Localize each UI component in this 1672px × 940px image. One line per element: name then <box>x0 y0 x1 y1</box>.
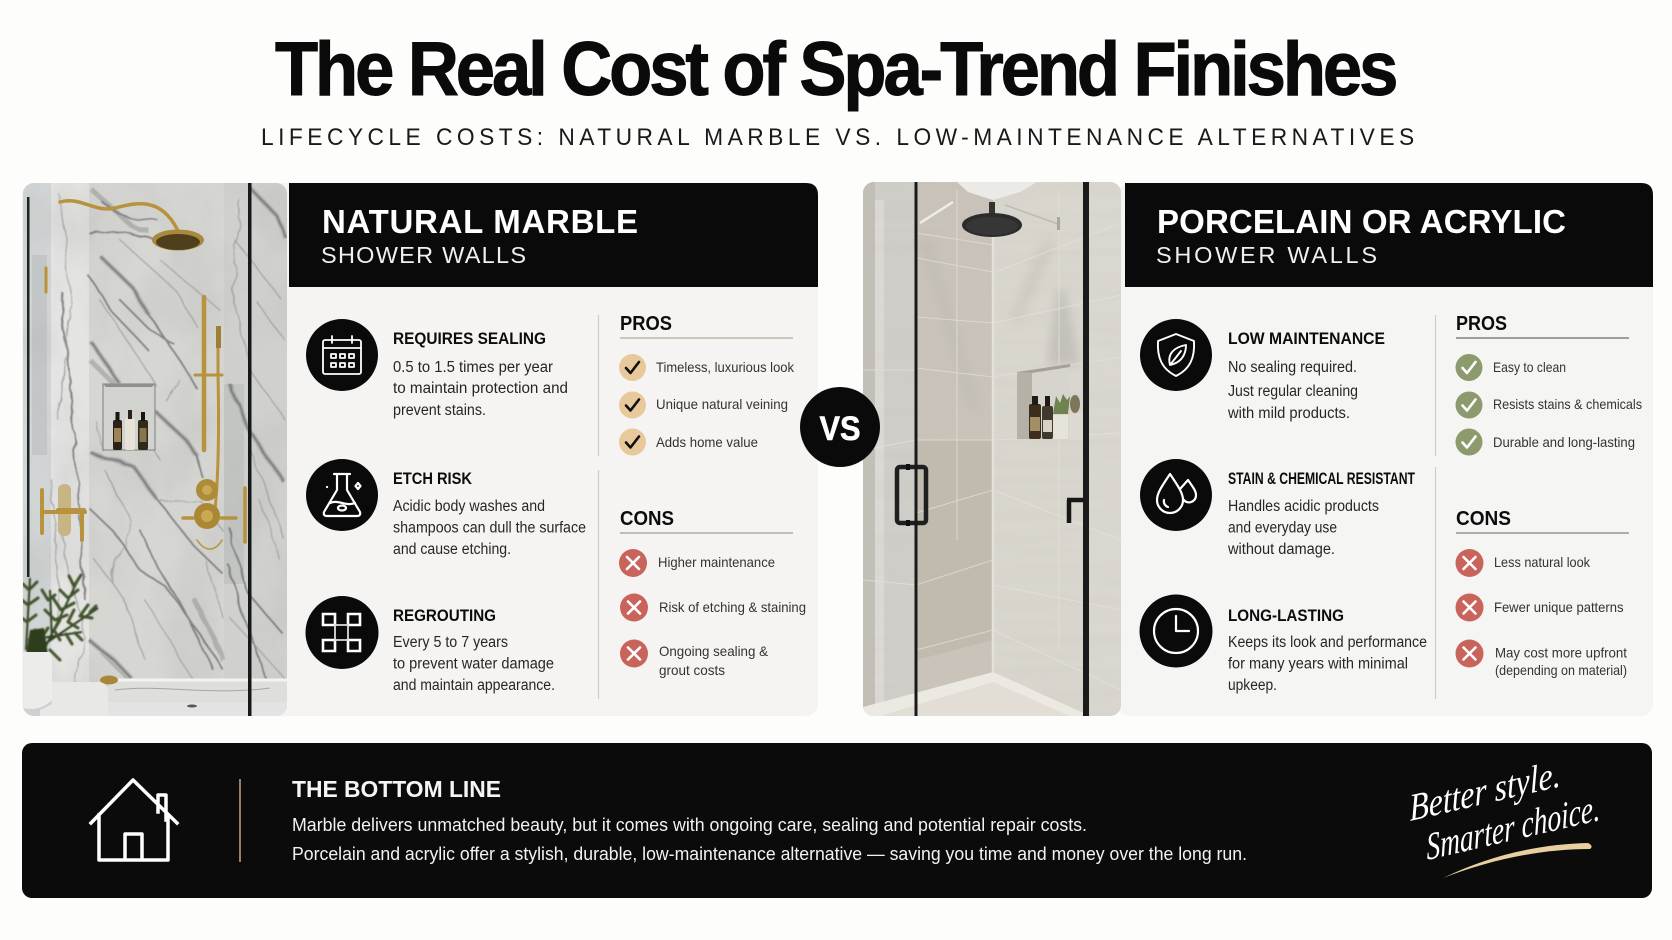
item: requires sealing: prevent stains. <box>393 402 486 419</box>
bench <box>100 676 287 716</box>
item: low maintenance: with mild products. <box>1227 405 1350 422</box>
lever <box>1067 500 1084 523</box>
heading: THE BOTTOM LINE <box>292 776 501 802</box>
header band <box>289 183 818 287</box>
item: long-lasting: LONG-LASTING <box>1228 606 1344 625</box>
pros list: marble: Unique natural veining <box>656 396 788 412</box>
icon: clock <box>1154 609 1198 653</box>
item: etch risk: and cause etching. <box>393 541 511 558</box>
subheading: SHOWER WALLS <box>1156 242 1377 268</box>
icon: flask <box>324 474 360 516</box>
glass door lines <box>27 183 252 716</box>
plant and pot <box>22 575 108 716</box>
item: long-lasting: Keeps its look and performance <box>1228 634 1427 651</box>
pros list: porcelain: Resists stains & chemicals <box>1493 396 1642 412</box>
item: low maintenance: LOW MAINTENANCE <box>1228 329 1385 348</box>
item: stain and chemical resistant: without damage. <box>1227 541 1335 558</box>
subheading: SHOWER WALLS <box>321 242 526 268</box>
item: regrouting: to prevent water damage <box>393 656 554 672</box>
item: etch risk: ETCH RISK <box>393 469 473 488</box>
title: The Real Cost of Spa-Trend Finishes <box>275 27 1398 112</box>
item: stain and chemical resistant <box>1140 459 1415 558</box>
item: stain and chemical resistant: STAIN & CHEMICAL RESISTANT <box>1228 469 1415 488</box>
item: regrouting: Every 5 to 7 years <box>393 634 508 651</box>
pros list: marble: Timeless, luxurious look <box>656 359 795 375</box>
gold fixtures <box>42 268 245 549</box>
item: etch risk <box>306 459 586 558</box>
icon: tile grid <box>323 614 360 651</box>
item: requires sealing <box>306 319 568 419</box>
item: requires sealing: 0.5 to 1.5 times per year <box>393 359 553 376</box>
cons list: marble: Higher maintenance <box>658 554 775 570</box>
VS badge <box>800 387 880 467</box>
pros list: porcelain: Durable and long-lasting <box>1493 434 1635 450</box>
pros list: marble <box>619 312 795 456</box>
cons list: porcelain: (depending on material) <box>1495 662 1627 678</box>
glass frame lines <box>914 182 1089 716</box>
item: regrouting: and maintain appearance. <box>393 677 555 694</box>
cons list: porcelain <box>1456 507 1629 678</box>
photo: porcelain shower <box>863 182 1121 716</box>
heading: PORCELAIN OR ACRYLIC <box>1157 203 1566 240</box>
cons list: marble: CONS <box>620 507 674 530</box>
pros list: porcelain: Easy to clean <box>1493 359 1566 375</box>
cons list: porcelain: CONS <box>1456 507 1511 530</box>
body text <box>292 814 1247 864</box>
header band <box>1125 183 1653 287</box>
item: requires sealing: REQUIRES SEALING <box>393 329 546 348</box>
shelf niche <box>103 384 155 450</box>
pros list: marble: PROS <box>620 312 672 335</box>
cons list: marble <box>619 507 806 678</box>
item: long-lasting: for many years with minimal <box>1228 656 1408 672</box>
shower head and arm <box>60 201 204 250</box>
item: etch risk: shampoos can dull the surface <box>393 520 586 536</box>
item: etch risk: Acidic body washes and <box>393 498 545 515</box>
pros list: marble: Adds home value <box>656 434 758 450</box>
icon: calendar <box>323 336 361 374</box>
wall niche <box>1017 364 1083 440</box>
shower tray <box>863 672 1090 716</box>
photo: marble shower <box>22 183 287 716</box>
rain shower head <box>962 202 1022 237</box>
script tagline: Smarter choice. <box>1425 787 1601 869</box>
pros list: porcelain <box>1456 312 1642 456</box>
item: low maintenance: No sealing required. <box>1228 359 1357 376</box>
cons list: porcelain: Fewer unique patterns <box>1494 599 1624 615</box>
item: long-lasting: upkeep. <box>1228 677 1277 694</box>
cons list: porcelain: May cost more upfront <box>1495 644 1627 660</box>
item: low maintenance <box>1140 319 1385 422</box>
cons list: marble: Ongoing sealing & <box>659 643 769 659</box>
bottom line banner <box>22 743 1652 898</box>
item: regrouting <box>306 596 555 694</box>
cons list: marble: grout costs <box>659 662 725 678</box>
VS badge: VS <box>820 410 860 448</box>
body text: Marble delivers unmatched beauty, but it comes with ongoing care, sealing and potential repair costs. <box>292 814 1087 835</box>
panel: porcelain or acrylic <box>863 182 1653 716</box>
item: requires sealing: to maintain protection and <box>393 380 568 397</box>
script tagline: Better style. <box>1408 753 1562 830</box>
cons list: marble: Risk of etching & staining <box>659 599 806 615</box>
script tagline <box>1408 753 1601 869</box>
gold swoosh <box>1443 843 1592 878</box>
item: long-lasting <box>1140 594 1427 694</box>
ceiling and arm <box>920 182 1060 230</box>
subtitle: LIFECYCLE COSTS: NATURAL MARBLE VS. LOW-MAINTENANCE ALTERNATIVES <box>261 124 1414 151</box>
item: regrouting: REGROUTING <box>393 606 496 625</box>
panel: natural marble <box>22 183 818 716</box>
door handle <box>897 464 926 526</box>
item: low maintenance: Just regular cleaning <box>1228 383 1358 400</box>
cons list: porcelain: Less natural look <box>1494 554 1591 570</box>
item: stain and chemical resistant: Handles acidic products <box>1228 498 1379 515</box>
icon: shield <box>1158 334 1194 376</box>
heading: NATURAL MARBLE <box>322 203 638 240</box>
item: stain and chemical resistant: and everyday use <box>1228 520 1337 536</box>
icon: house <box>91 780 177 860</box>
body text: Porcelain and acrylic offer a stylish, durable, low-maintenance alternative — saving you time and money over the long run. <box>292 843 1247 864</box>
pros list: porcelain: PROS <box>1456 312 1507 335</box>
icon: water drops <box>1157 474 1196 513</box>
